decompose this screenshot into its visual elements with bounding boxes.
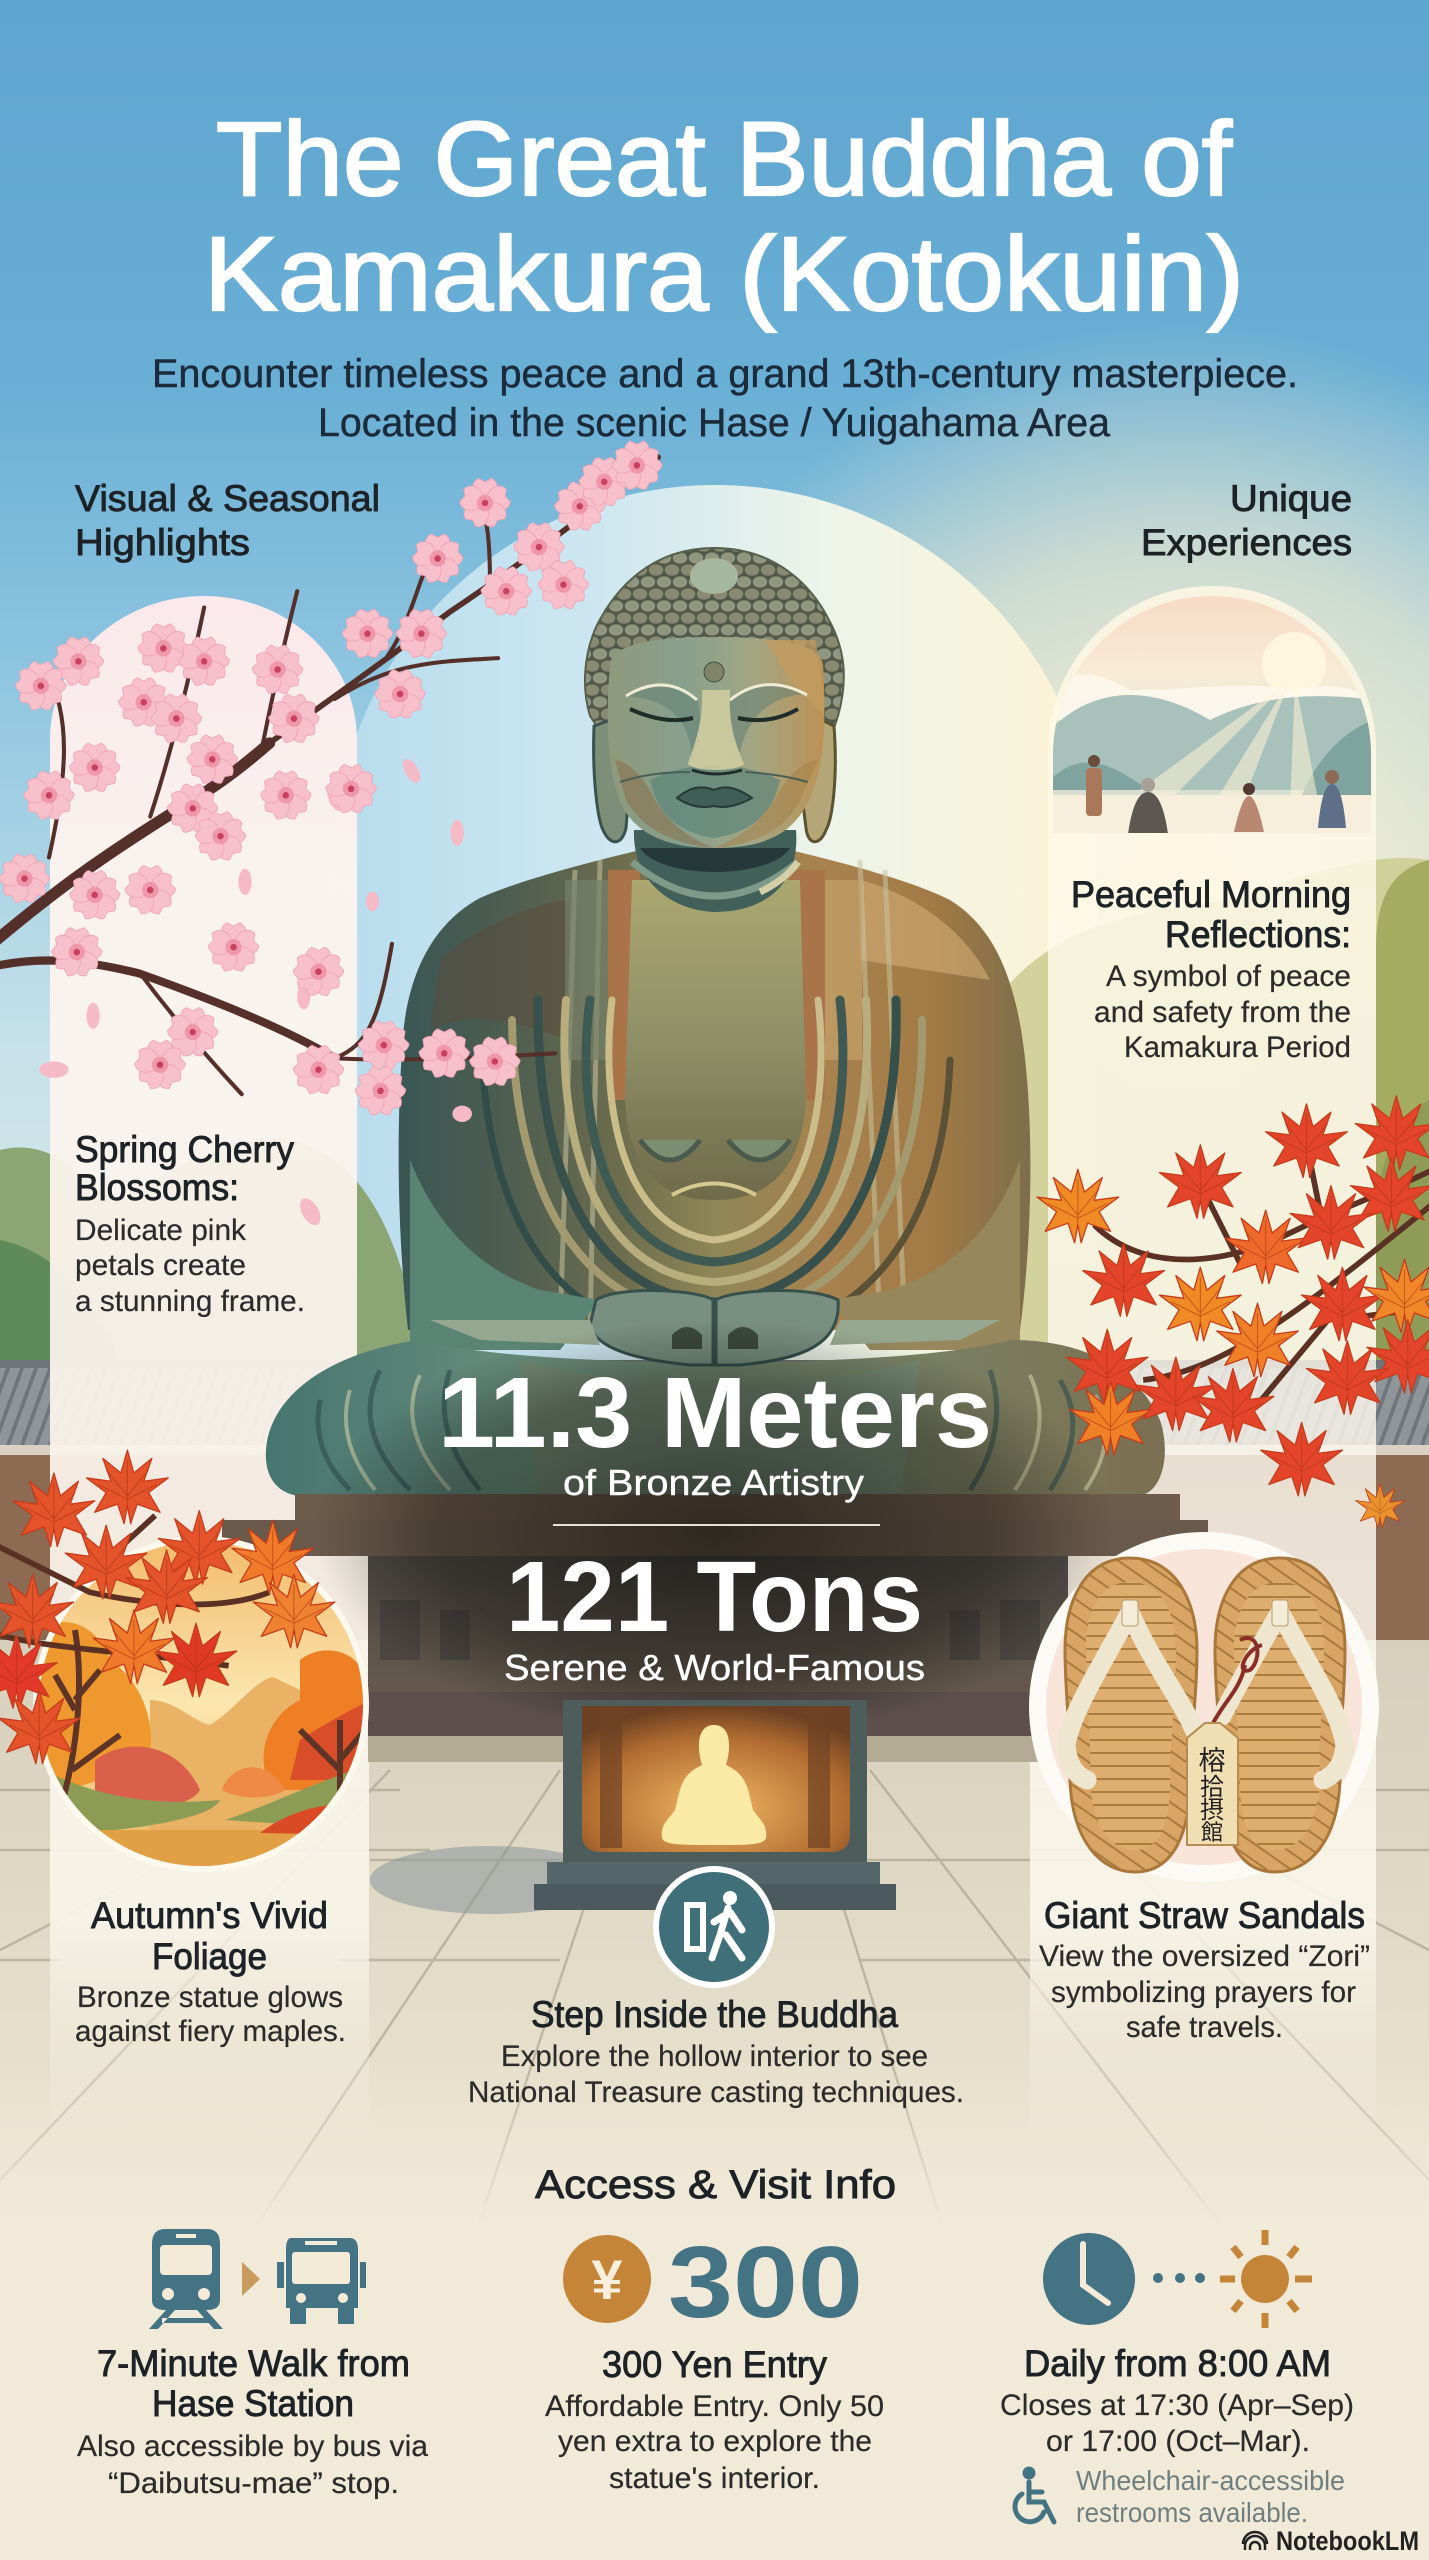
text: accessibility note: restrooms available. xyxy=(1076,2497,1308,2528)
wooden ema tag with Japanese characters: 拾 xyxy=(1200,1767,1224,1802)
maple branches and leaves, left cluster xyxy=(0,1450,335,1764)
wooden ema tag with Japanese characters: 館 xyxy=(1201,1815,1223,1847)
text: giant straw sandals: safe travels. xyxy=(1126,2011,1283,2044)
title: The Great Buddha of xyxy=(216,101,1233,218)
heading: unique experiences: Unique xyxy=(1230,478,1352,519)
landscape: trees, temple roofs and walls xyxy=(0,858,1429,1645)
subtitle xyxy=(152,352,1298,445)
text: autumn's vivid foliage: Autumn's Vivid xyxy=(91,1895,328,1936)
text: autumn's vivid foliage: against fiery maples. xyxy=(75,2015,346,2048)
text: spring cherry blossoms xyxy=(75,1129,305,1318)
text: peaceful morning reflections: Peaceful Morning xyxy=(1071,874,1351,915)
heading: unique experiences: Experiences xyxy=(1141,522,1352,563)
text: spring cherry blossoms: Delicate pink xyxy=(75,1214,247,1247)
text: autumn's vivid foliage: Foliage xyxy=(152,1936,267,1977)
stat: 11.3 meters: of Bronze Artistry xyxy=(563,1462,864,1503)
heading: unique experiences xyxy=(1141,478,1352,563)
text: step inside the Buddha: Step Inside the Buddha xyxy=(531,1994,898,2035)
wooden ema tag with Japanese characters: 榕 xyxy=(1198,1739,1226,1778)
fee: yen coin and 300: ¥ xyxy=(591,2248,623,2311)
text: spring cherry blossoms: a stunning frame. xyxy=(75,1285,305,1318)
text: accessibility note: Wheelchair-accessible xyxy=(1076,2465,1345,2496)
cherry blossom branches xyxy=(0,441,664,1229)
stat divider xyxy=(553,1524,880,1526)
text: 300 yen entry xyxy=(545,2344,884,2495)
subtitle: Located in the scenic Hase / Yuigahama Area xyxy=(318,401,1111,445)
pedestal: stone steps and wall xyxy=(222,1494,1208,1762)
text: peaceful morning reflections xyxy=(1071,874,1351,1064)
text: autumn's vivid foliage: Bronze statue glows xyxy=(77,1981,343,2014)
text: step inside the Buddha: National Treasure casting techniques. xyxy=(468,2076,964,2109)
statue neck xyxy=(632,830,798,912)
text: 300 yen entry: Affordable Entry. Only 50 xyxy=(545,2390,884,2423)
medallion: autumn foliage landscape xyxy=(30,1530,375,1875)
panel: left seasonal highlights xyxy=(50,596,369,2150)
text: 300 yen entry: yen extra to explore the xyxy=(558,2425,872,2458)
text: giant straw sandals: Giant Straw Sandals xyxy=(1044,1895,1365,1936)
text: spring cherry blossoms: Blossoms: xyxy=(75,1167,239,1208)
heading: visual and seasonal highlights xyxy=(75,478,380,563)
heading: access and visit info: Access & Visit Info xyxy=(535,2163,896,2207)
title: Kamakura (Kotokuin) xyxy=(204,216,1244,333)
text: walk from Hase Station: Hase Station xyxy=(152,2383,354,2424)
subtitle: Encounter timeless peace and a grand 13th-century masterpiece. xyxy=(152,352,1298,396)
fee: yen coin and 300: 300 xyxy=(668,2227,863,2339)
fee: yen coin and 300 xyxy=(563,2227,863,2339)
right Morning reflection arch scene xyxy=(1050,590,1380,840)
text: spring cherry blossoms: Spring Cherry xyxy=(75,1129,294,1170)
large halo arch behind the statue xyxy=(333,485,1097,1400)
statue head and hair curls xyxy=(585,548,844,848)
silhouette xyxy=(662,1725,766,1845)
access icons: train, arrow and bus xyxy=(149,2229,366,2329)
glowing dark panel behind big numbers xyxy=(314,1320,1114,1740)
ground paving xyxy=(0,1640,1429,2560)
wooden ema tag with Japanese characters: 摂 xyxy=(1200,1790,1224,1825)
shrine doorway with glowing Buddha silhouette xyxy=(534,1700,896,1910)
text: peaceful morning reflections: A symbol of peace xyxy=(1106,960,1351,993)
text: opening hours xyxy=(1000,2343,1354,2458)
statue body and robe xyxy=(399,850,1030,1350)
icon: wheelchair xyxy=(1015,2469,1054,2522)
text: step inside the Buddha: Explore the hollow interior to see xyxy=(501,2040,928,2073)
illustration: Great Buddha statue xyxy=(266,548,1165,1496)
text: giant straw sandals: symbolizing prayers for xyxy=(1051,1976,1356,2009)
people reflecting xyxy=(1086,755,1346,834)
text: walk from Hase Station: Also accessible by bus via xyxy=(77,2430,428,2463)
text: spring cherry blossoms: petals create xyxy=(75,1249,246,1282)
stat: 11.3 meters: 11.3 Meters xyxy=(438,1357,992,1469)
wooden ema tag with Japanese characters xyxy=(1187,1723,1238,1847)
text: walk from Hase Station: “Daibutsu-mae” stop. xyxy=(108,2467,399,2500)
heading: visual and seasonal highlights: Visual & Seasonal xyxy=(75,478,380,519)
text: peaceful morning reflections: Reflections: xyxy=(1165,914,1351,955)
straw sandal left xyxy=(1065,1558,1197,1872)
stat: 121 tons: 121 Tons xyxy=(506,1541,923,1653)
icon: person stepping through door xyxy=(656,1869,772,1985)
text: 300 yen entry: 300 Yen Entry xyxy=(602,2344,827,2385)
text: autumn's vivid foliage xyxy=(75,1895,346,2048)
title xyxy=(204,101,1244,333)
straw sandal right xyxy=(1215,1558,1345,1872)
sky background xyxy=(0,0,1429,1700)
statue crossed legs and hands xyxy=(266,1291,1165,1496)
text: step inside the Buddha xyxy=(468,1994,964,2109)
maple branches and leaves, right cluster xyxy=(1037,1096,1429,1528)
text: giant straw sandals xyxy=(1039,1895,1370,2044)
text: walk from Hase Station xyxy=(77,2343,428,2500)
text: giant straw sandals: View the oversized “Zori” xyxy=(1039,1940,1370,1973)
text: walk from Hase Station: 7-Minute Walk from xyxy=(97,2343,410,2384)
text: accessibility note xyxy=(1076,2465,1345,2528)
text: opening hours: Daily from 8:00 AM xyxy=(1024,2343,1331,2384)
medallion: giant straw sandals xyxy=(1029,1532,1379,1882)
text: 300 yen entry: statue's interior. xyxy=(609,2462,820,2495)
heading: visual and seasonal highlights: Highlights xyxy=(75,522,250,563)
stat: 121 tons: Serene & World-Famous xyxy=(504,1647,925,1688)
text: peaceful morning reflections: Kamakura Period xyxy=(1124,1031,1351,1064)
icon: clock to sun xyxy=(1043,2230,1312,2328)
text: peaceful morning reflections: and safety from the xyxy=(1094,996,1351,1029)
text: opening hours: Closes at 17:30 (Apr–Sep) xyxy=(1000,2389,1354,2422)
panel: right unique experiences xyxy=(1030,586,1376,2150)
text: opening hours: or 17:00 (Oct–Mar). xyxy=(1046,2425,1310,2458)
